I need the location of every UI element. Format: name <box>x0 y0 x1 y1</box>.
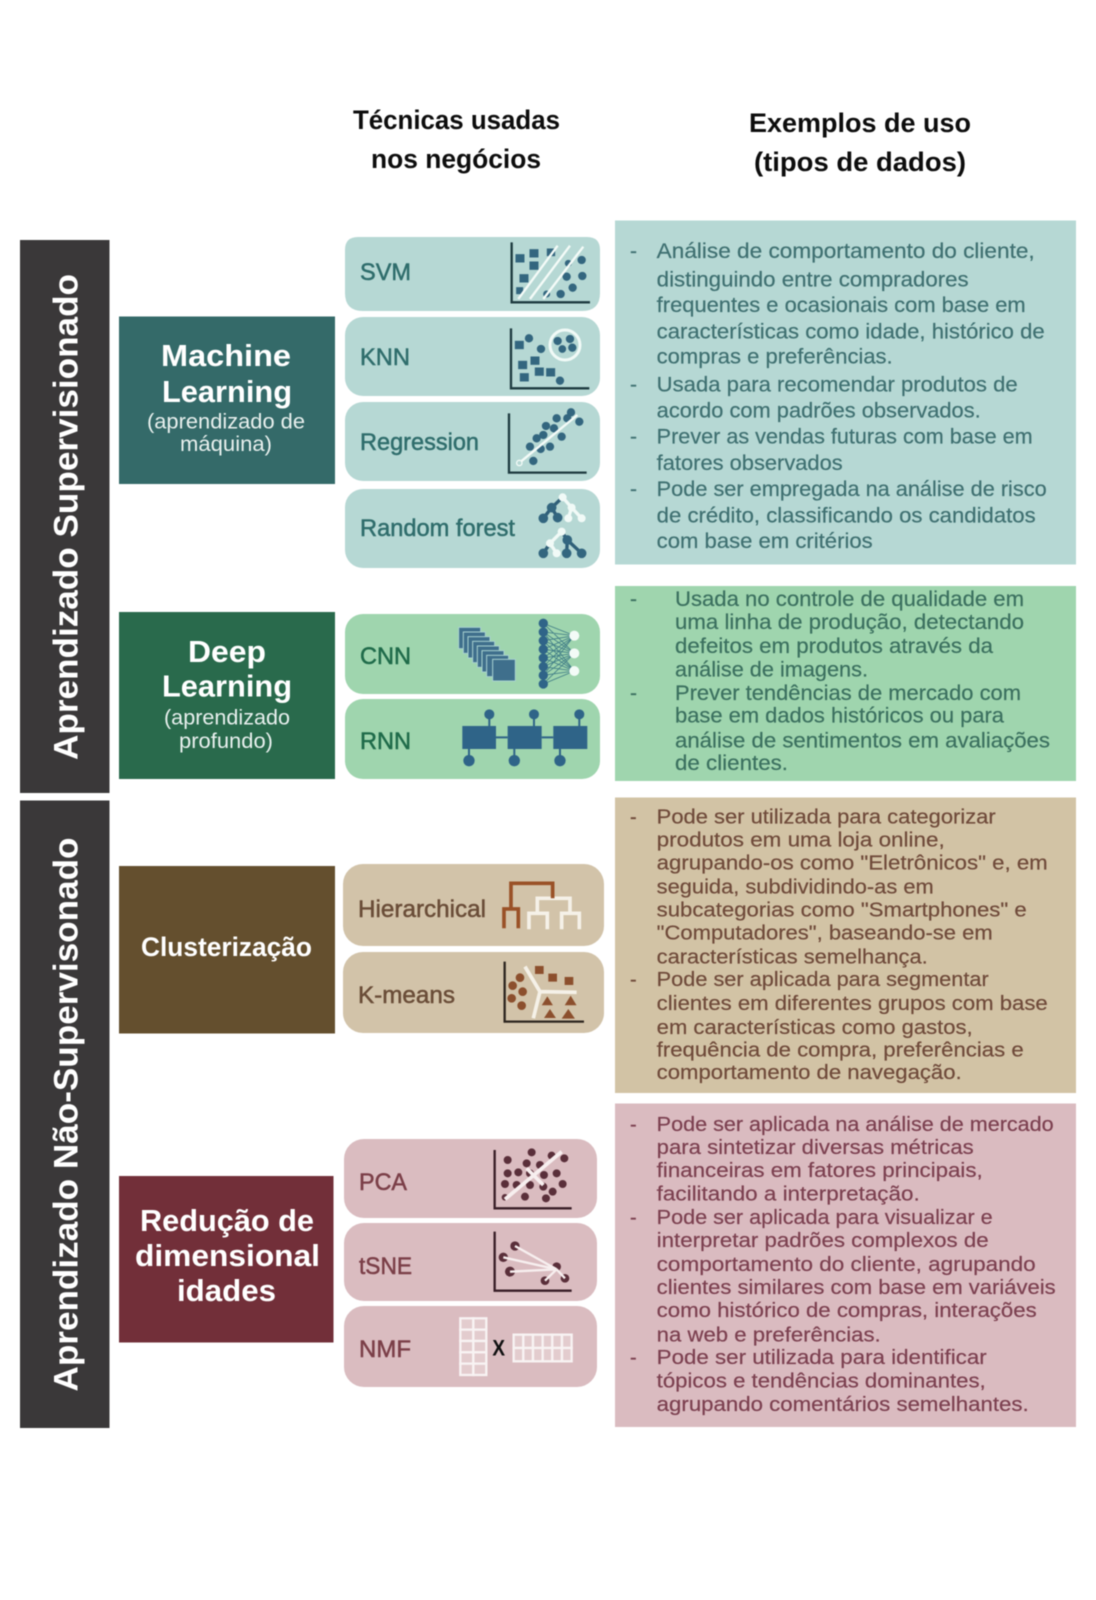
panel: exemplos clusterização: Pode ser utilizada para categorizar <box>657 806 996 828</box>
panel: exemplos clusterização: produtos em uma loja online, <box>657 830 945 852</box>
panel: exemplos clusterização: agrupando-os como "Eletrônicos" e, em <box>657 852 1048 874</box>
panel: exemplos deep learning: defeitos em produtos através da <box>675 635 993 658</box>
technique pill: K-means: K-means <box>358 982 455 1009</box>
category box: clusterização: Clusterização <box>141 932 312 962</box>
category box: clusterização <box>119 866 335 1034</box>
panel: exemplos machine learning: com base em critérios <box>657 530 873 553</box>
panel: exemplos deep learning: de clientes. <box>675 752 788 775</box>
panel: exemplos deep learning: - <box>630 588 637 611</box>
icon: SVM scatter with margin <box>512 242 590 302</box>
panel: exemplos clusterização: seguida, subdividindo-as em <box>657 876 934 898</box>
panel: exemplos redução de dimensionalidades: - <box>630 1114 637 1136</box>
icon: random forest trees <box>539 493 586 558</box>
technique pill: RNN: RNN <box>360 728 411 755</box>
heading: técnicas usadas nos negócios <box>353 105 560 174</box>
category box: machine learning: máquina) <box>180 433 272 456</box>
technique pill: tSNE <box>344 1223 597 1301</box>
panel: exemplos machine learning <box>615 220 1076 564</box>
panel: exemplos redução de dimensionalidades: financeiras em fatores principais, <box>657 1160 983 1182</box>
panel: exemplos machine learning: Pode ser empregada na análise de risco <box>657 478 1047 501</box>
category box: machine learning: Machine <box>161 338 291 373</box>
icon: matrix factorisation: X <box>492 1336 505 1361</box>
panel: exemplos machine learning: - <box>630 426 637 448</box>
panel: exemplos clusterização: "Computadores", baseando-se em <box>657 922 993 944</box>
panel: exemplos deep learning: uma linha de produção, detectando <box>675 611 1024 634</box>
panel: exemplos redução de dimensionalidades <box>615 1104 1076 1427</box>
category box: deep learning: Deep <box>188 634 266 669</box>
side band: aprendizado não-supervisionado <box>20 800 110 1428</box>
technique pill: Random forest <box>345 489 600 568</box>
panel: exemplos machine learning: Análise de comportamento do cliente, <box>657 240 1035 263</box>
category box: redução de dimensionalidades <box>119 1176 334 1342</box>
panel: exemplos machine learning: - <box>630 374 637 396</box>
panel: exemplos deep learning: Usada no controle de qualidade em <box>675 588 1024 611</box>
panel: exemplos clusterização <box>615 798 1076 1093</box>
icon: tSNE point mapping <box>495 1232 572 1291</box>
panel: exemplos redução de dimensionalidades: agrupando comentários semelhantes. <box>657 1394 1029 1416</box>
panel: exemplos redução de dimensionalidades: facilitando a interpretação. <box>657 1184 920 1206</box>
technique pill: Regression: Regression <box>360 429 479 456</box>
panel: exemplos redução de dimensionalidades: Pode ser aplicada na análise de mercado <box>657 1114 1054 1136</box>
panel: exemplos deep learning: análise de sentimentos em avaliações <box>675 730 1050 752</box>
panel: exemplos clusterização: frequência de compra, preferências e <box>657 1040 1024 1062</box>
panel: exemplos clusterização: comportamento de navegação. <box>657 1062 962 1084</box>
panel: exemplos redução de dimensionalidades: tópicos e tendências dominantes, <box>657 1370 986 1392</box>
category box: machine learning: Learning <box>162 374 292 409</box>
category box: deep learning <box>119 612 335 779</box>
panel: exemplos machine learning: características como idade, histórico de <box>657 320 1045 344</box>
panel: exemplos redução de dimensionalidades: comportamento do cliente, agrupando <box>657 1254 1036 1276</box>
technique pill: SVM: SVM <box>360 259 411 286</box>
panel: exemplos redução de dimensionalidades: clientes similares com base em variáveis <box>657 1277 1056 1299</box>
panel: exemplos redução de dimensionalidades: para sintetizar diversas métricas <box>657 1137 974 1159</box>
technique pill: Regression <box>345 402 600 481</box>
category box: deep learning: profundo) <box>179 730 273 753</box>
category box: deep learning: (aprendizado <box>164 706 290 730</box>
icon: PCA scatter and axes <box>495 1148 572 1208</box>
panel: exemplos deep learning: Prever tendências de mercado com <box>675 682 1021 705</box>
category box: deep learning: Learning <box>162 668 292 704</box>
technique pill: KNN <box>345 317 600 396</box>
panel: exemplos clusterização: - <box>630 969 637 991</box>
panel: exemplos machine learning: Prever as vendas futuras com base em <box>657 426 1033 448</box>
side band: aprendizado supervisionado <box>20 240 110 793</box>
panel: exemplos deep learning: - <box>630 682 637 705</box>
category box: machine learning <box>119 316 335 484</box>
panel: exemplos redução de dimensionalidades: Pode ser aplicada para visualizar e <box>657 1207 993 1229</box>
icon: matrix factorisation <box>460 1318 572 1375</box>
technique pill: KNN: KNN <box>360 344 410 371</box>
panel: exemplos machine learning: acordo com padrões observados. <box>657 400 981 422</box>
technique pill: tSNE: tSNE <box>359 1253 412 1280</box>
technique pill: PCA: PCA <box>359 1169 407 1196</box>
panel: exemplos deep learning: análise de imagens. <box>675 658 868 682</box>
panel: exemplos machine learning: - <box>630 240 637 263</box>
panel: exemplos machine learning: de crédito, classificando os candidatos <box>657 504 1036 528</box>
technique pill: SVM <box>345 237 600 311</box>
technique pill: RNN <box>345 699 600 779</box>
panel: exemplos deep learning: base em dados históricos ou para <box>675 704 1004 728</box>
panel: exemplos clusterização: - <box>630 806 637 828</box>
category box: redução de dimensionalidades: dimensional <box>135 1238 320 1273</box>
technique pill: K-means <box>343 952 604 1033</box>
heading: exemplos de uso: Exemplos de uso <box>749 108 971 138</box>
category box: machine learning: (aprendizado de <box>147 410 305 434</box>
panel: exemplos machine learning: - <box>630 478 637 501</box>
technique pill: NMF <box>344 1306 597 1387</box>
side band: aprendizado supervisionado: Aprendizado Supervisionado <box>48 274 86 760</box>
icon: KNN scatter with neighbourhood <box>511 328 589 388</box>
heading: exemplos de uso: (tipos de dados) <box>754 147 966 177</box>
panel: exemplos clusterização: Pode ser aplicada para segmentar <box>657 969 989 991</box>
side band: aprendizado não-supervisionado: Aprendizado Não-Supervisonado <box>48 838 86 1392</box>
panel: exemplos machine learning: compras e preferências. <box>657 346 893 368</box>
technique pill: Random forest: Random forest <box>360 515 515 542</box>
panel: exemplos redução de dimensionalidades: - <box>630 1347 637 1369</box>
panel: exemplos redução de dimensionalidades: Pode ser utilizada para identificar <box>657 1347 987 1369</box>
panel: exemplos redução de dimensionalidades: como histórico de compras, interações <box>657 1300 1037 1322</box>
panel: exemplos machine learning: fatores observados <box>657 452 843 475</box>
panel: exemplos machine learning: Usada para recomendar produtos de <box>657 374 1018 396</box>
panel: exemplos clusterização: subcategorias como "Smartphones" e <box>657 900 1027 922</box>
heading: técnicas usadas nos negócios: nos negócios <box>371 144 541 174</box>
technique pill: Hierarchical: Hierarchical <box>358 896 486 923</box>
panel: exemplos machine learning: frequentes e ocasionais com base em <box>657 294 1026 317</box>
panel: exemplos redução de dimensionalidades: na web e preferências. <box>657 1324 881 1346</box>
panel: exemplos clusterização: em características como gastos, <box>657 1017 973 1039</box>
panel: exemplos clusterização: características semelhança. <box>657 946 928 968</box>
technique pill: NMF: NMF <box>359 1336 411 1363</box>
panel: exemplos deep learning <box>615 586 1076 781</box>
panel: exemplos machine learning: distinguindo entre compradores <box>657 268 969 292</box>
icon: recurrent network cells <box>462 709 587 766</box>
category box: redução de dimensionalidades: idades <box>177 1273 276 1308</box>
icon: regression line <box>509 409 587 473</box>
panel: exemplos redução de dimensionalidades: - <box>630 1207 637 1229</box>
panel: exemplos clusterização: clientes em diferentes grupos com base <box>657 993 1048 1015</box>
technique pill: CNN <box>345 614 600 694</box>
icon: dendrogram <box>504 883 579 929</box>
heading: exemplos de uso <box>749 108 971 177</box>
technique pill: Hierarchical <box>343 864 604 946</box>
panel: exemplos redução de dimensionalidades: interpretar padrões complexos de <box>657 1230 989 1252</box>
technique pill: CNN: CNN <box>360 643 411 670</box>
icon: k-means clusters <box>505 962 584 1022</box>
heading: técnicas usadas nos negócios: Técnicas usadas <box>353 105 560 135</box>
technique pill: PCA <box>344 1139 597 1218</box>
category box: redução de dimensionalidades: Redução de <box>140 1203 314 1238</box>
icon: convolution stack and network <box>459 619 579 689</box>
